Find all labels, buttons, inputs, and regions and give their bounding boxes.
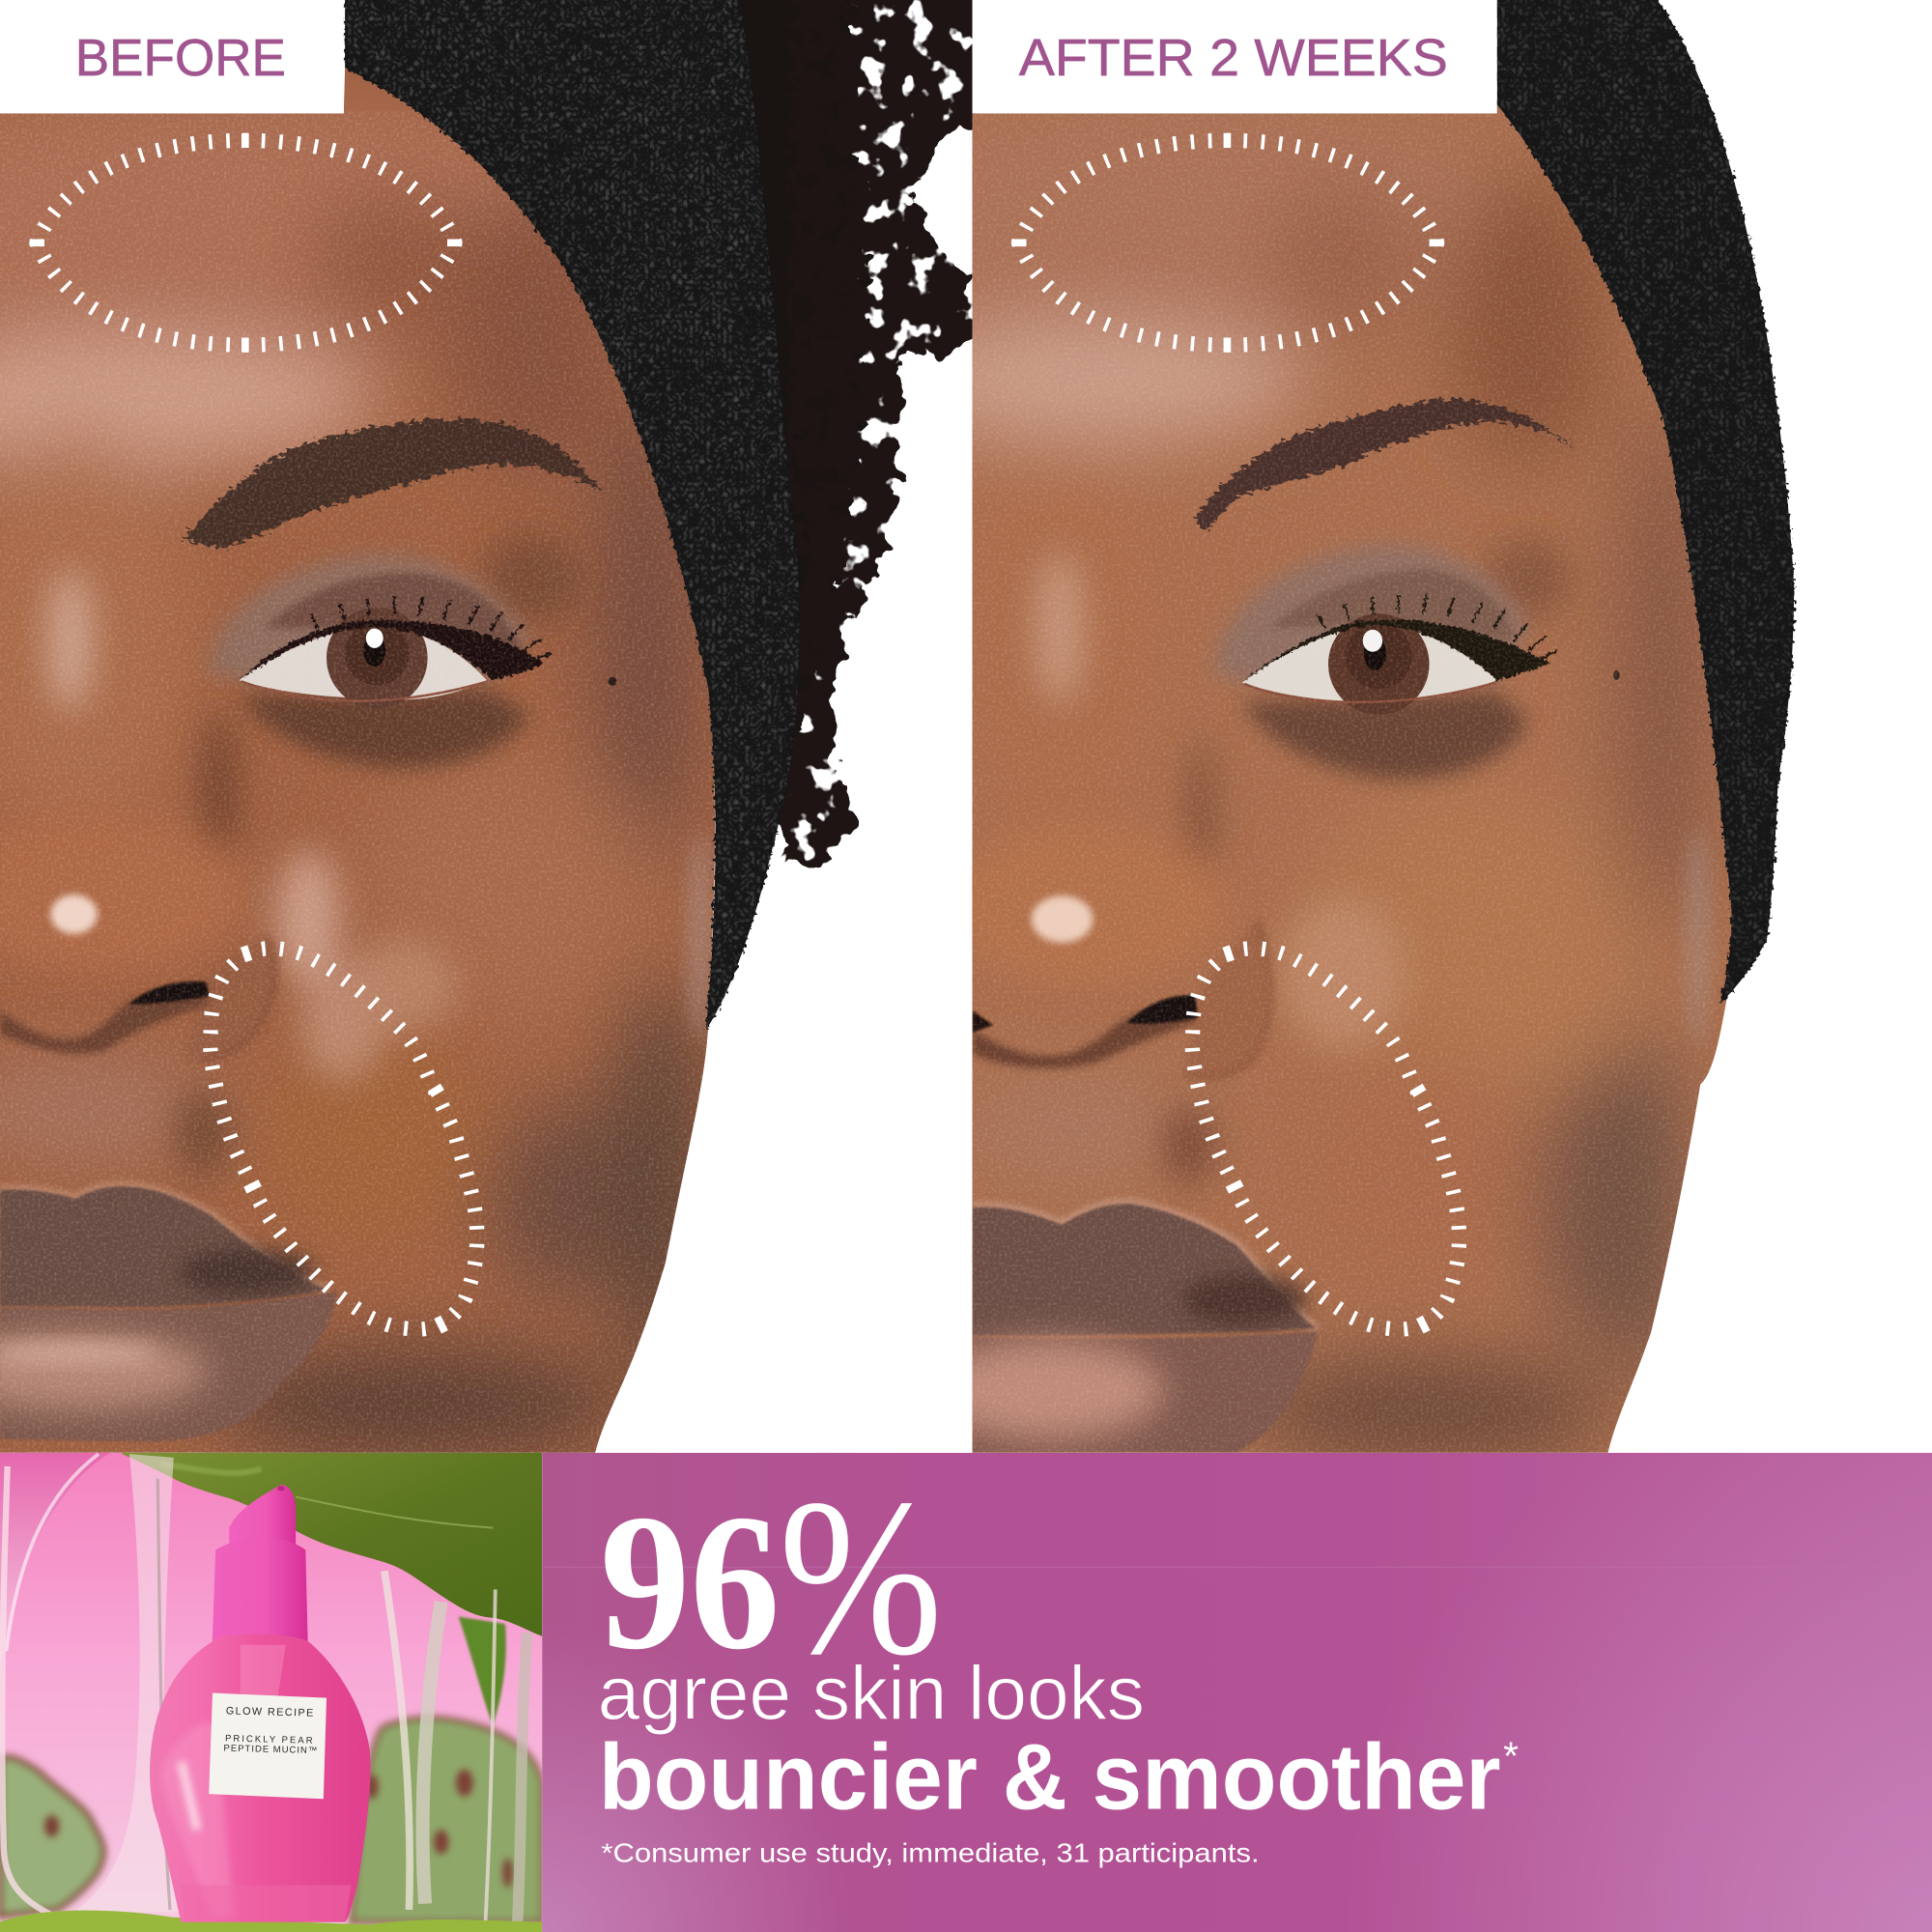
- nose: [0, 895, 278, 1062]
- subheading: bouncier and smoother: *: [1503, 1734, 1519, 1778]
- product label: GLOW RECIPE: [226, 1705, 313, 1719]
- cactus pads: [0, 1718, 542, 1922]
- subheading: bouncier and smoother: bouncier & smoother: [599, 1723, 1501, 1829]
- label: after 2 weeks: AFTER 2 WEEKS: [1019, 29, 1448, 87]
- slime strands: [0, 1453, 527, 1922]
- panel: before photo: [0, 0, 985, 1460]
- headband: [1491, 0, 1811, 1023]
- eye: [183, 418, 616, 768]
- bottle: [150, 1485, 370, 1922]
- forehead marker dashed outline: [30, 133, 462, 353]
- headband: [332, 0, 826, 1035]
- label: after 2 weeks: [972, 0, 1497, 113]
- subheading: agree skin looks: agree skin looks: [598, 1649, 1145, 1735]
- heading: 96%: %: [779, 1453, 943, 1701]
- product label: PRICKLY PEAR: [225, 1733, 313, 1747]
- lips: [0, 1186, 337, 1441]
- eye: [1195, 399, 1620, 780]
- face skin: [0, 49, 739, 1460]
- lips: [930, 1204, 1318, 1453]
- panel: after photo: [972, 0, 1797, 1453]
- cactus leaf top: [122, 1453, 542, 1725]
- curly hair: [666, 0, 985, 873]
- label: before: BEFORE: [75, 29, 286, 87]
- cheek marker dashed outline: [1192, 947, 1460, 1332]
- cheek marker dashed outline: [211, 947, 477, 1332]
- ground slime: [0, 1911, 542, 1932]
- panel: stat: [542, 1453, 1932, 1932]
- product label: [209, 1693, 327, 1799]
- heading: 96%: [600, 1453, 943, 1701]
- nose: [972, 895, 1270, 1077]
- product label: PEPTIDE MUCIN™: [223, 1744, 318, 1756]
- heading: 96%: 96: [600, 1473, 780, 1690]
- face skin: [838, 93, 1761, 1466]
- panel: product photo: [0, 1453, 542, 1932]
- label: before: [0, 0, 344, 113]
- footnote: *Consumer use study, immediate, 31 participants.: [601, 1837, 1260, 1867]
- forehead marker dashed outline: [1011, 133, 1444, 353]
